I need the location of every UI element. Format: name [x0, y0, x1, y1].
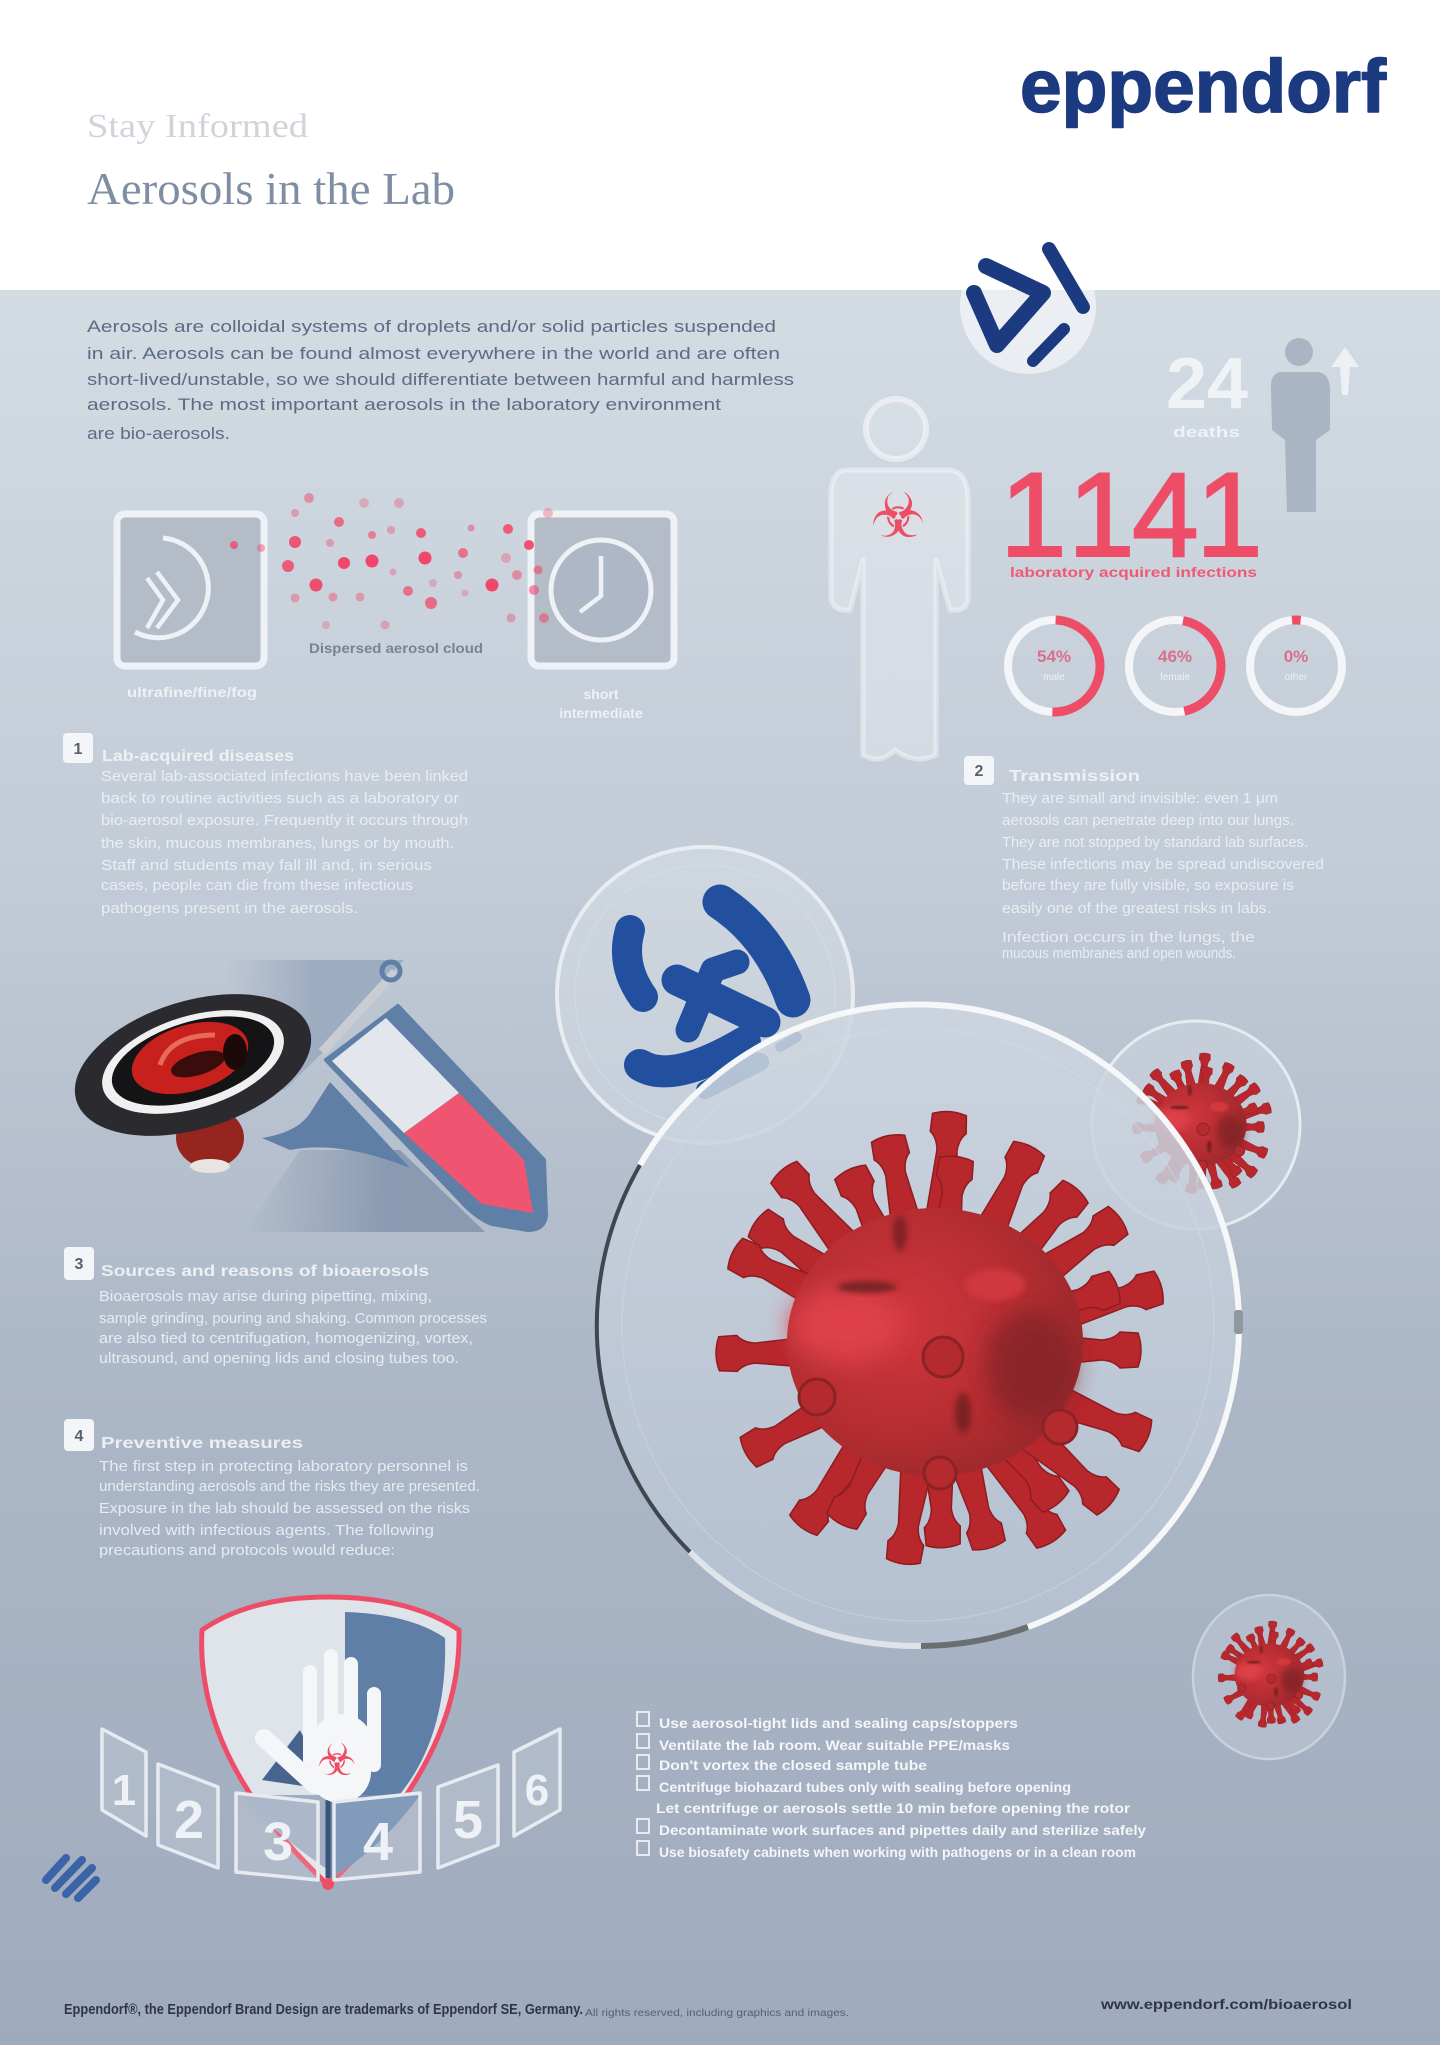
section 1 body: the skin, mucous membranes, lungs or by mouth. — [101, 836, 454, 852]
stat: 24 deaths with small person — [1166, 338, 1359, 512]
section 2 body: before they are fully visible, so exposure is — [1002, 878, 1294, 894]
icon: top chromosome mark — [960, 238, 1096, 374]
section 2 body — [1002, 791, 1324, 962]
label: aerosol cloud: Dispersed aerosol cloud — [309, 640, 483, 656]
stat: 1141 infections — [1000, 448, 1263, 582]
section 2: transmission — [964, 756, 1324, 962]
card 6: 6 — [525, 1766, 549, 1815]
number 1141: 1141 — [1000, 448, 1263, 582]
icon: clock box — [531, 514, 674, 666]
illustration: centrifuge rotor and tube — [58, 960, 546, 1232]
badge 3 — [64, 1247, 94, 1280]
ring chart: 54%: 54% — [1037, 647, 1071, 666]
section 1 body — [101, 769, 468, 917]
section 4 body: involved with infectious agents. The following — [99, 1523, 434, 1539]
section 1 heading: Lab-acquired diseases — [102, 748, 294, 765]
large virus — [716, 1110, 1166, 1567]
number 24: 24 — [1166, 344, 1248, 424]
section 4 body: The first step in protecting laboratory personnel is — [99, 1459, 468, 1475]
section 3 body: ultrasound, and opening lids and closing tubes too. — [99, 1351, 459, 1367]
section 3 heading: Sources and reasons of bioaerosols — [101, 1263, 429, 1280]
highlights and shadows — [790, 1215, 1075, 1433]
label infections: laboratory acquired infections — [1010, 564, 1257, 580]
section 2 body: These infections may be spread undiscovered — [1002, 857, 1324, 873]
surface protein rings — [799, 1337, 1077, 1489]
checklist items: Centrifuge biohazard tubes only with sealing before opening — [659, 1780, 1071, 1795]
checklist items: Ventilate the lab room. Wear suitable PPE/masks — [659, 1738, 1010, 1753]
overline: Stay Informed: Stay Informed — [87, 108, 308, 145]
checklist items: Let centrifuge or aerosols settle 10 min before opening the rotor — [656, 1801, 1131, 1816]
section 3: sources and reasons — [64, 1247, 487, 1367]
ring chart: 0%: 0% — [1284, 647, 1308, 666]
card 6 — [514, 1729, 560, 1836]
card 2: 2 — [174, 1790, 204, 1850]
checklist items: Use biosafety cabinets when working with pathogens or in a clean room — [659, 1845, 1136, 1860]
aerosol diagram — [117, 493, 674, 721]
hand — [264, 1656, 374, 1785]
rotor — [58, 968, 328, 1173]
icon: particle size box — [117, 514, 264, 666]
checklist items: Don't vortex the closed sample tube — [659, 1758, 928, 1773]
card 1: 1 — [112, 1766, 136, 1815]
section 2 body: easily one of the greatest risks in labs. — [1002, 901, 1271, 917]
card 4 — [334, 1793, 420, 1880]
shadow panel — [225, 960, 485, 1232]
intro paragraph: are bio-aerosols. — [87, 424, 230, 443]
label: duration — [559, 686, 643, 721]
checklist items — [656, 1716, 1147, 1860]
ring chart: 0% — [1246, 616, 1346, 716]
small virus — [1133, 1053, 1272, 1194]
intro paragraph — [87, 317, 794, 443]
card 4: 4 — [363, 1812, 393, 1872]
intro paragraph: aerosols. The most important aerosols in the laboratory environment — [87, 395, 721, 414]
card 3 — [236, 1793, 318, 1880]
card 5: 5 — [453, 1790, 483, 1850]
icon: white up arrow — [1331, 347, 1359, 395]
title: Aerosols in the Lab: Aerosols in the Lab — [87, 163, 455, 214]
ring chart: 54% — [1006, 618, 1102, 714]
card 2 — [158, 1764, 218, 1868]
badge 2 — [964, 756, 994, 785]
bubble: blue chromosomes — [557, 847, 853, 1143]
badge 1 — [63, 733, 93, 763]
section 1 body: pathogens present in the aerosols. — [101, 901, 358, 917]
main glass bubble — [597, 1004, 1243, 1646]
section 2 body: aerosols can penetrate deep into our lungs. — [1002, 813, 1294, 829]
icon: small chromosome mark — [46, 1858, 96, 1898]
section 3 body: Bioaerosols may arise during pipetting, mixing, — [99, 1289, 432, 1305]
section 4 heading: Preventive measures — [101, 1435, 303, 1452]
section 2 body: Infection occurs in the lungs, the — [1002, 930, 1255, 946]
footer legal text: Eppendorf®, the Eppendorf Brand Design are trademarks of Eppendorf SE, Germany. — [64, 2001, 583, 2018]
label: duration: intermediate — [559, 705, 643, 721]
body — [787, 1208, 1083, 1476]
section 1 body: Staff and students may fall ill and, in serious — [101, 858, 432, 874]
aerosol particle cloud — [230, 493, 553, 630]
badge 4: 4 — [75, 1428, 84, 1445]
section 2 body: They are not stopped by standard lab surfaces. — [1002, 835, 1308, 851]
badge 2: 2 — [975, 763, 984, 780]
tube — [322, 962, 546, 1230]
checklist items: Decontaminate work surfaces and pipettes daily and sterilize safely — [659, 1823, 1147, 1838]
eppendorf logo: eppendorf — [1020, 44, 1387, 128]
ring chart: 0%: other — [1285, 672, 1308, 683]
section 4: preventive measures — [64, 1419, 480, 1559]
icon: biohazard on hand: ☣ — [317, 1735, 357, 1786]
numbered precaution cards — [102, 1729, 560, 1880]
section 3 body — [99, 1289, 487, 1367]
label deaths: deaths — [1173, 424, 1240, 441]
spikes — [716, 1110, 1166, 1567]
section 3 body: sample grinding, pouring and shaking. Common processes — [99, 1311, 487, 1327]
ring chart: 54%: male — [1043, 672, 1065, 683]
section 1 body: back to routine activities such as a laboratory or — [101, 791, 459, 807]
icon: small grey person — [1271, 338, 1330, 512]
label: particle size: ultrafine/fine/fog — [127, 684, 257, 700]
badge 4 — [64, 1419, 94, 1451]
section 1: lab-acquired diseases — [63, 733, 468, 917]
intro paragraph: in air. Aerosols can be found almost everywhere in the world and are often — [87, 344, 780, 363]
intro paragraph: Aerosols are colloidal systems of droplets and/or solid particles suspended — [87, 317, 776, 336]
icon: biohazard on chest: ☣ — [870, 479, 926, 552]
badge 1: 1 — [74, 741, 83, 758]
shield — [202, 1597, 459, 1885]
shield illustration — [202, 1597, 459, 1890]
section 4 body: understanding aerosols and the risks they are presented. — [99, 1479, 480, 1495]
card 3: 3 — [263, 1812, 293, 1872]
section 3 body: are also tied to centrifugation, homogenizing, vortex, — [99, 1331, 473, 1347]
section 4 body — [99, 1459, 480, 1559]
card 1 — [102, 1729, 146, 1836]
ring chart: 46%: female — [1160, 672, 1190, 683]
heading block — [87, 108, 455, 214]
icon: large white person with biohazard — [831, 399, 968, 759]
section 1 body: bio-aerosol exposure. Frequently it occurs through — [101, 813, 468, 829]
section 2 body: mucous membranes and open wounds. — [1002, 946, 1236, 962]
bubble: upper-right small virus — [1092, 1021, 1300, 1229]
ring chart: 46%: 46% — [1158, 647, 1192, 666]
shield tip — [322, 1878, 334, 1890]
bubble: bottom-right small virus — [1193, 1595, 1345, 1759]
card 5 — [438, 1765, 498, 1868]
section 2 body: They are small and invisible: even 1 μm — [1002, 791, 1278, 807]
ring chart: 46% — [1122, 613, 1228, 719]
section 4 body: Exposure in the lab should be assessed on the risks — [99, 1501, 470, 1517]
small virus — [1218, 1621, 1324, 1728]
footer legal text: All rights reserved, including graphics and images. — [585, 2008, 849, 2019]
section 1 body: cases, people can die from these infectious — [101, 878, 413, 894]
precaution checklist — [637, 1712, 1147, 1860]
checklist items: Use aerosol-tight lids and sealing caps/stoppers — [659, 1716, 1018, 1731]
checkboxes — [637, 1712, 649, 1855]
intro paragraph: short-lived/unstable, so we should differentiate between harmful and harmless — [87, 370, 794, 389]
label: duration: short — [584, 686, 619, 702]
section 1 body: Several lab-associated infections have been linked — [101, 769, 468, 785]
section 4 body: precautions and protocols would reduce: — [99, 1543, 395, 1559]
section 2 heading: Transmission — [1009, 768, 1140, 785]
badge 3: 3 — [75, 1256, 84, 1273]
footer web address: www.eppendorf.com/bioaerosol — [1100, 1996, 1352, 2012]
